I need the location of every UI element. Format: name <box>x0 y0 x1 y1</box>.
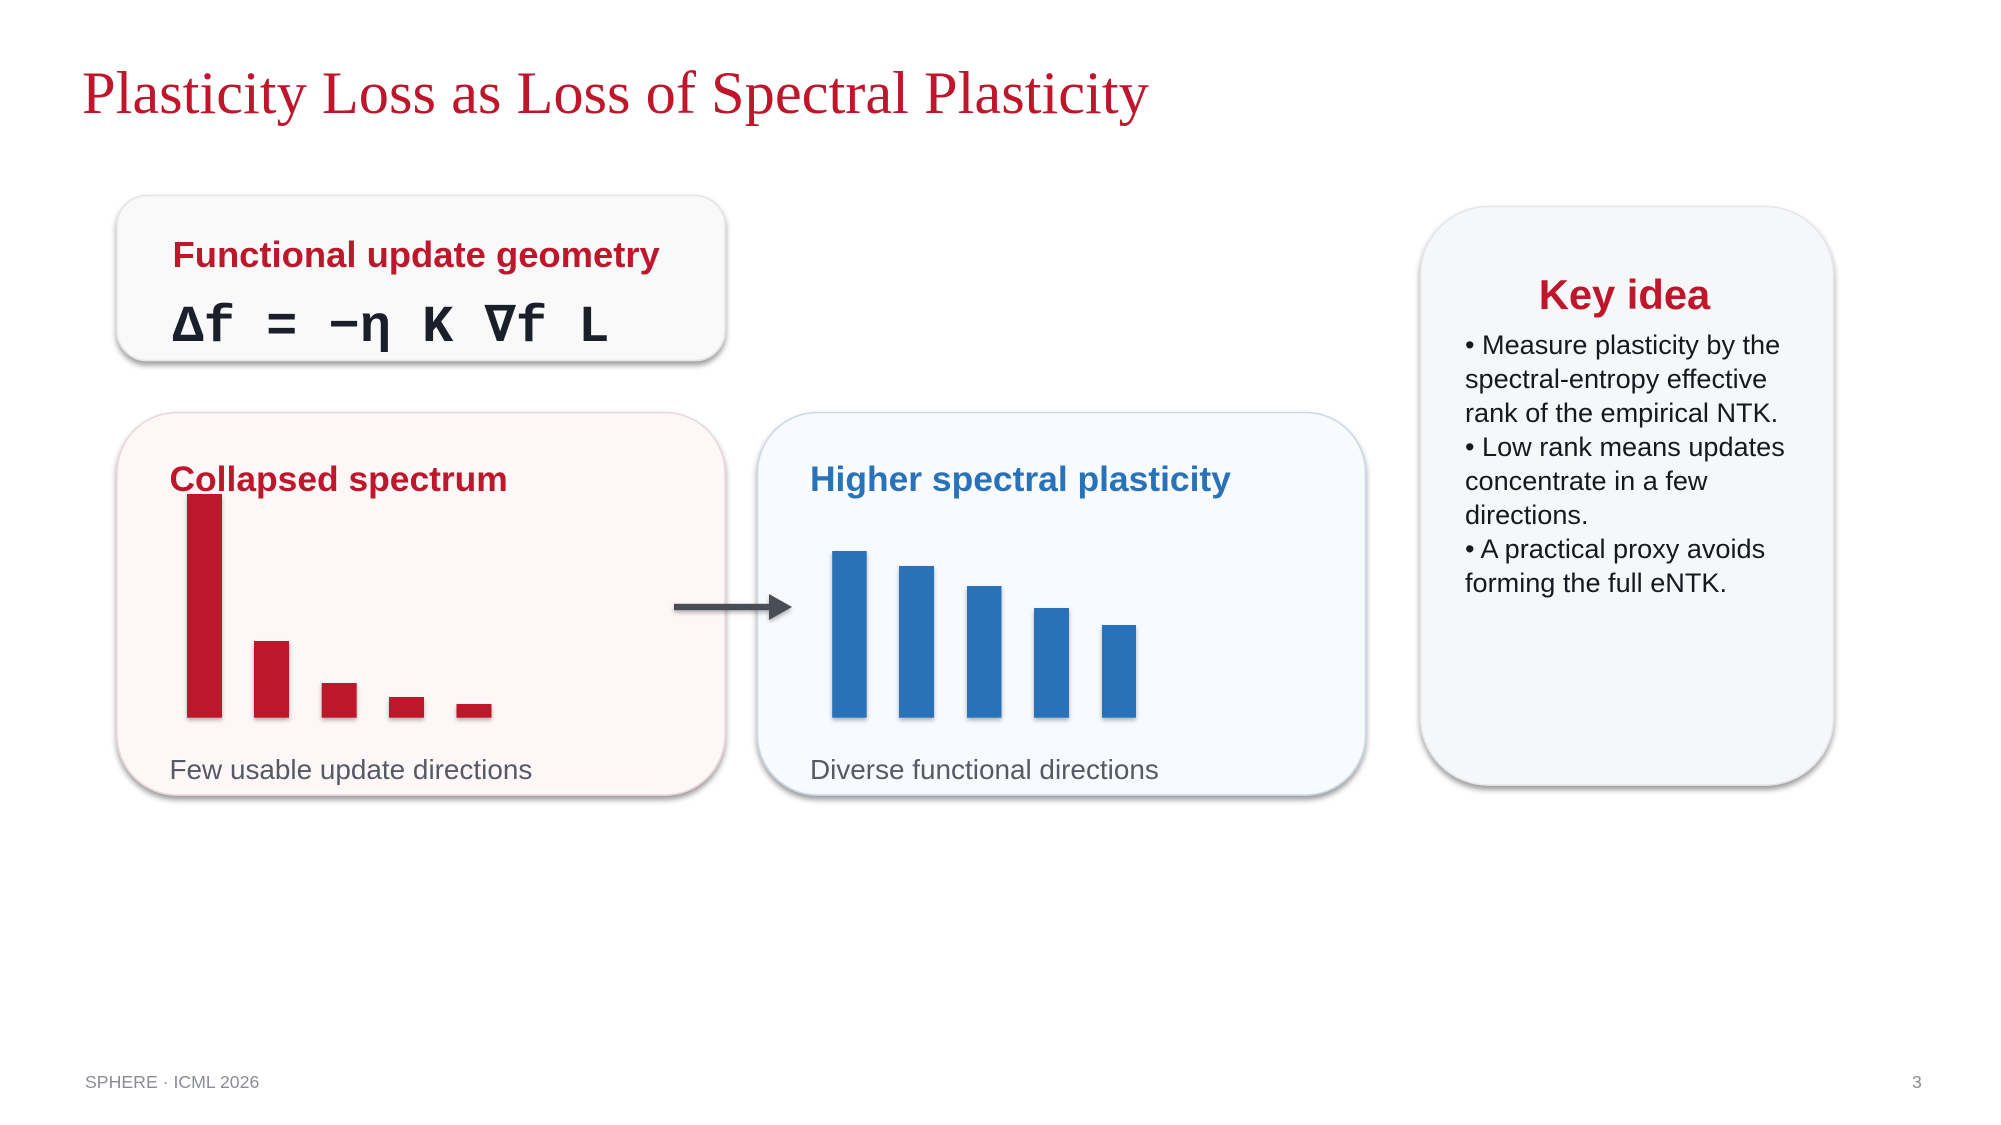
heading: collapsed spectrum: Collapsed spectrum <box>170 459 508 499</box>
bar chart: collapsed spectrum <box>187 494 492 718</box>
heading: higher spectral plasticity: Higher spectral plasticity <box>810 459 1231 499</box>
bullet list: • A practical proxy avoids <box>1465 533 1765 564</box>
panel: collapsed spectrum <box>117 412 725 795</box>
heading: functional update geometry: Functional update geometry <box>172 234 661 275</box>
arrow <box>674 594 792 620</box>
bullet list: • Low rank means updates <box>1465 431 1785 462</box>
bullet list <box>1465 329 1785 598</box>
bullet list: rank of the empirical NTK. <box>1465 397 1778 428</box>
bullet list: • Measure plasticity by the <box>1465 329 1780 360</box>
footer text: SPHERE · ICML 2026 <box>85 1072 259 1092</box>
panel: functional update geometry <box>117 196 725 360</box>
title: Plasticity Loss as Loss of Spectral Plasticity <box>82 60 1149 127</box>
bar chart: higher spectral plasticity <box>832 551 1136 718</box>
panel: higher spectral plasticity <box>758 412 1366 795</box>
bullet list: forming the full eNTK. <box>1465 567 1727 598</box>
bullet list: spectral-entropy effective <box>1465 363 1767 394</box>
bullet list: concentrate in a few <box>1465 465 1708 496</box>
caption: few usable update directions: Few usable update directions <box>170 754 532 785</box>
bullet list: directions. <box>1465 499 1588 530</box>
heading: key idea: Key idea <box>1539 271 1711 318</box>
formula: Δf = −η K ∇f L <box>172 298 609 357</box>
page number: 3 <box>1912 1072 1922 1092</box>
caption: diverse functional directions: Diverse functional directions <box>810 754 1159 785</box>
panel: key idea <box>1420 206 1834 785</box>
